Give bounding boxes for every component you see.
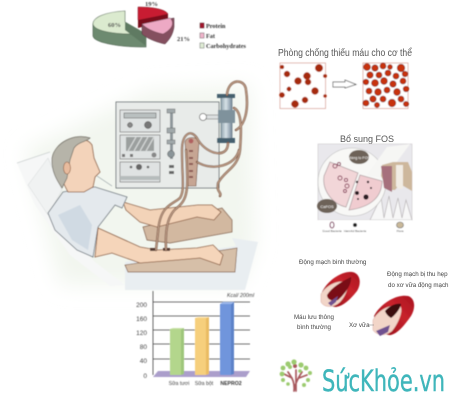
pie legend	[200, 23, 246, 50]
dialyzer column	[200, 94, 235, 143]
y axis labels: 80	[140, 344, 147, 351]
pie labels: 21%	[177, 36, 190, 43]
upper arm far	[123, 202, 221, 227]
x axis labels: Sữa bột	[195, 381, 214, 387]
y axis labels: 40	[140, 358, 147, 365]
pie legend: Fat	[206, 33, 216, 40]
artery labels	[294, 259, 449, 331]
villi lines	[370, 196, 412, 220]
y axis labels: 160	[136, 316, 147, 323]
callout: prebiotic: Máng lọ FOS	[348, 156, 371, 160]
FOS legend: Harmful Bacteria	[344, 229, 366, 233]
illustration backdrop	[25, 85, 255, 285]
panel: dense blood cells	[363, 63, 409, 108]
tubing highlight	[156, 82, 247, 250]
head	[52, 137, 112, 192]
artery labels: Xơ vữa	[349, 322, 370, 329]
artery: narrowed	[373, 296, 414, 336]
artery labels: bình thường	[297, 324, 332, 331]
bed and pillow	[17, 152, 258, 290]
artery labels: Động mạch bị thu hẹp	[387, 271, 448, 278]
plaque pointer	[367, 324, 374, 326]
logo: SứcKhỏe.vn	[280, 359, 445, 398]
dialysis machine	[116, 102, 219, 188]
bar: NEPRO2	[220, 302, 234, 375]
chart base	[153, 371, 250, 377]
arm rest lower	[125, 248, 237, 272]
intestine cross-section	[318, 144, 410, 216]
FOS legend	[318, 220, 412, 233]
fat slice 21%	[142, 18, 174, 44]
callout: CaFOS: CaFOS	[320, 204, 334, 209]
pie labels: 60%	[108, 22, 121, 29]
protein slice 19%	[138, 7, 168, 28]
anemia heading: Phòng chống thiếu máu cho cơ thể	[278, 47, 412, 59]
lower arm with access	[95, 228, 223, 265]
artery labels: Máu lưu thông	[294, 314, 335, 321]
y axis labels: 120	[136, 330, 147, 337]
FOS heading: Bổ sung FOS	[340, 134, 394, 144]
panel: sparse blood cells	[279, 63, 327, 108]
patient shirt	[48, 187, 127, 257]
artery: normal	[321, 272, 360, 307]
x axis labels	[169, 381, 242, 387]
bar: powdered milk	[195, 317, 209, 375]
x axis labels: Sữa tươi	[169, 381, 189, 387]
pie labels	[108, 1, 190, 43]
arm rest upper	[143, 208, 232, 243]
FOS legend: Flora	[397, 229, 404, 233]
illustration: dialysis patient	[17, 82, 258, 290]
pie labels: 19%	[145, 1, 158, 8]
artery labels: Động mạch bình thường	[299, 259, 367, 266]
y axis labels: 200	[136, 302, 147, 309]
x axis labels: NEPRO2	[220, 381, 242, 387]
FOS legend: Good Bacteria	[322, 229, 342, 233]
logo tree icon	[280, 359, 312, 391]
pie legend: Protein	[206, 23, 226, 30]
pie legend: Carbohydrates	[206, 43, 246, 50]
y axis labels	[136, 302, 147, 380]
bar chart: energy per 200ml	[136, 291, 255, 387]
arrow	[333, 80, 356, 88]
panel: FOS gut diagram	[317, 144, 412, 233]
chart unit: Kcal/ 200ml	[227, 293, 255, 299]
y axis labels: 0	[143, 373, 147, 380]
blood tubing	[156, 82, 247, 250]
gut wall	[381, 162, 412, 192]
carbohydrates slice 60%	[93, 11, 146, 47]
chart grid and axis	[153, 291, 250, 375]
pie chart: macronutrients	[93, 1, 246, 50]
bar: fresh milk	[170, 328, 184, 375]
artery labels: do xơ vữa động mạch	[388, 282, 449, 289]
